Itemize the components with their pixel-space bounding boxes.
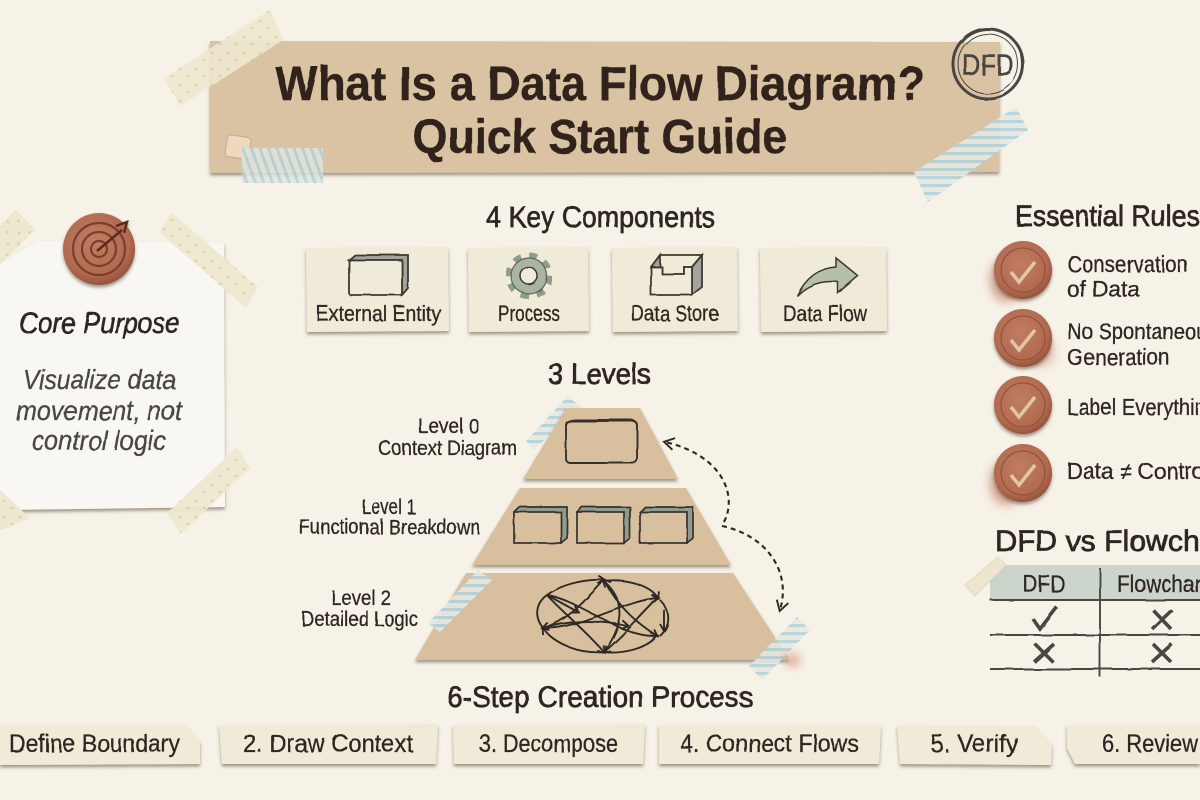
card: process bbox=[468, 247, 589, 332]
label: External Entity bbox=[316, 301, 441, 326]
step 1 bbox=[0, 725, 200, 765]
tape: bottom-left of note bbox=[0, 490, 30, 530]
icon: three boxes bbox=[514, 507, 693, 543]
panel: 4 key components bbox=[306, 201, 887, 332]
icon: target seal bbox=[63, 213, 135, 285]
label: level 0 bbox=[378, 415, 517, 460]
tape: top-left dotted bbox=[164, 10, 283, 106]
title text: What Is a Data Flow Diagram? bbox=[275, 58, 925, 111]
label: Data Flow bbox=[783, 301, 867, 326]
text: core purpose body: Visualize data bbox=[23, 364, 176, 395]
banner paper bbox=[210, 41, 1000, 173]
tape: bottom-left striped bbox=[225, 134, 323, 183]
panel: essential rules bbox=[990, 200, 1200, 505]
pyramid tier: level 1 bbox=[472, 488, 731, 565]
step 5: 5. Verify bbox=[930, 730, 1018, 758]
step 3: 3. Decompose bbox=[479, 730, 618, 758]
text: core purpose body bbox=[16, 364, 183, 456]
label: level 1: Functional Breakdown bbox=[299, 516, 480, 539]
icon: tray bbox=[651, 255, 702, 295]
label: level 2: Level 2 bbox=[331, 587, 391, 610]
rule 3 bbox=[994, 376, 1200, 434]
step 4 bbox=[659, 725, 881, 764]
icon: curved arrow bbox=[797, 258, 858, 296]
icon: wax check bbox=[994, 309, 1054, 367]
step 4: 4. Connect Flows bbox=[680, 730, 859, 758]
arrow: level 1 to level 0 bbox=[665, 442, 729, 522]
tape: pyramid bottom-right bbox=[749, 617, 810, 680]
step 6 bbox=[1067, 725, 1200, 764]
text bbox=[1067, 318, 1200, 370]
tape: level 0 bbox=[526, 396, 582, 449]
pyramid tier: level 2 bbox=[415, 573, 790, 660]
text: core purpose body: control logic bbox=[32, 425, 166, 456]
text bbox=[1067, 251, 1188, 302]
tape: level 2 bbox=[428, 570, 492, 632]
arrow: level 1 to level 2 bbox=[722, 526, 783, 610]
icon: wax check bbox=[994, 376, 1052, 434]
heading: 3 levels: 3 Levels bbox=[548, 358, 651, 391]
icon: wax check bbox=[990, 444, 1052, 505]
text: Generation bbox=[1067, 344, 1170, 370]
card: external entity bbox=[306, 247, 449, 332]
stamp: DFD bbox=[953, 29, 1023, 99]
stamp: DFD: DFD bbox=[962, 49, 1014, 82]
rule 4 bbox=[990, 444, 1200, 505]
icon: wax check bbox=[990, 241, 1052, 302]
card: data store bbox=[612, 247, 738, 332]
label: level 0: Context Diagram bbox=[378, 437, 517, 460]
pyramid tier: level 0 bbox=[523, 408, 678, 479]
label: level 2: Detailed Logic bbox=[301, 608, 418, 631]
comparison table bbox=[965, 557, 1200, 677]
title banner bbox=[164, 10, 1028, 202]
card: data flow bbox=[760, 247, 887, 332]
table header: dfd: DFD bbox=[1023, 571, 1065, 598]
step 5 bbox=[897, 725, 1052, 765]
title text bbox=[275, 58, 925, 164]
text: Conservation bbox=[1067, 251, 1188, 277]
panel: dfd vs flowchart bbox=[965, 525, 1200, 677]
label: level 1: Level 1 bbox=[362, 496, 416, 519]
icon: tangled flows bbox=[537, 580, 668, 652]
text: of Data bbox=[1067, 276, 1140, 302]
heading: 4 key components: 4 Key Components bbox=[486, 201, 715, 234]
note paper bbox=[0, 241, 225, 510]
tape: bottom-right of note bbox=[167, 447, 250, 534]
tape: top-right of note bbox=[159, 213, 258, 308]
title text: Quick Start Guide bbox=[413, 111, 787, 164]
tape: bottom-right striped bbox=[914, 107, 1028, 202]
cell marks bbox=[1033, 607, 1172, 662]
label: level 2 bbox=[301, 587, 418, 631]
step 1: Define Boundary bbox=[9, 730, 180, 758]
heading: core purpose: Core Purpose bbox=[19, 307, 180, 340]
panel: 3 levels pyramid bbox=[299, 358, 810, 680]
label: Process bbox=[498, 301, 560, 326]
step 2 bbox=[219, 724, 438, 764]
step 3 bbox=[453, 724, 645, 764]
label: level 1 bbox=[299, 496, 480, 539]
wax smudge bbox=[786, 653, 800, 667]
tape: table corner bbox=[965, 557, 1006, 596]
panel: 6-step creation process bbox=[0, 681, 1200, 765]
heading: 6-step creation process: 6-Step Creation Process bbox=[447, 681, 753, 714]
tape: top-left of note bbox=[0, 210, 35, 270]
icon: box bbox=[349, 255, 408, 295]
step 2: 2. Draw Context bbox=[243, 730, 413, 758]
rule 1 bbox=[990, 241, 1188, 302]
icon: single box bbox=[566, 420, 637, 463]
text: core purpose body: movement, not bbox=[16, 395, 183, 426]
icon: gear bbox=[508, 256, 550, 296]
label: Data Store bbox=[631, 301, 719, 326]
rule 2 bbox=[994, 309, 1200, 370]
panel: core purpose bbox=[0, 210, 258, 534]
label: level 0: Level 0 bbox=[418, 415, 479, 438]
